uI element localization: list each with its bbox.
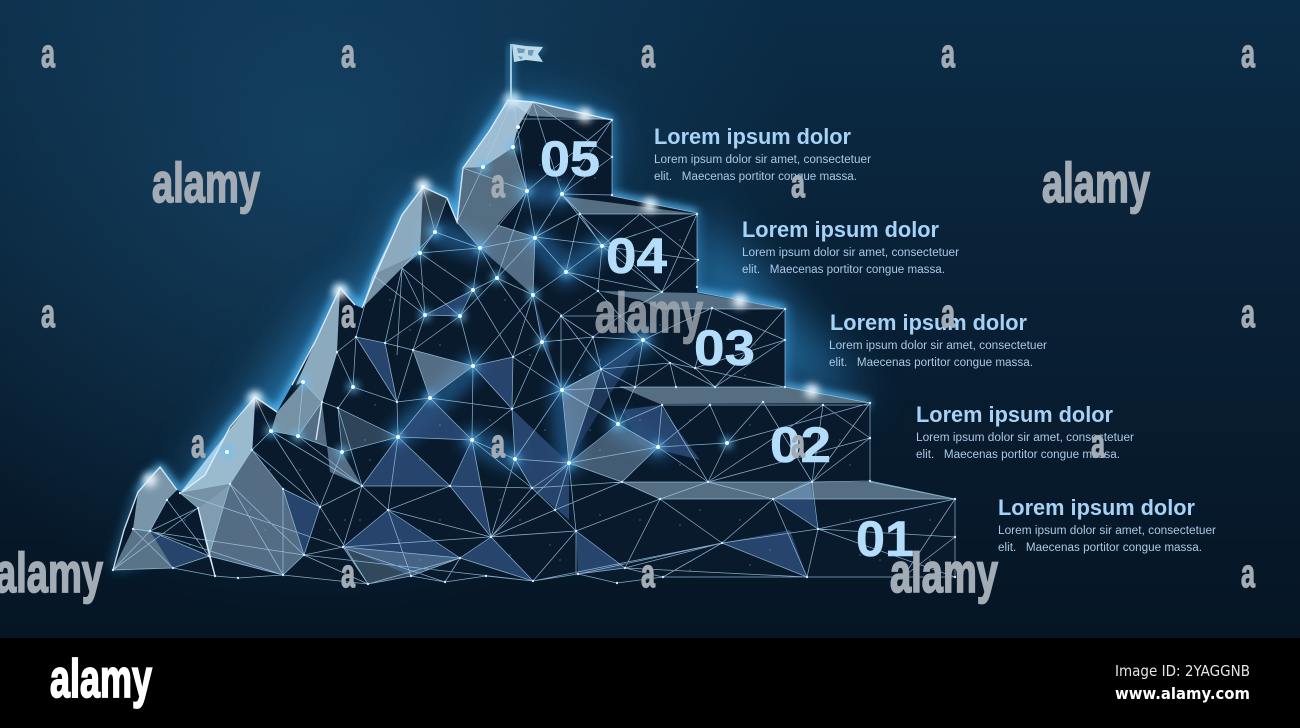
watermarks: a <box>491 422 505 466</box>
watermarks: a <box>1241 552 1255 596</box>
watermarks: a <box>941 292 955 336</box>
text block 02 <box>916 402 1134 461</box>
number 05: 05 <box>540 131 600 187</box>
mesh specks <box>185 150 930 570</box>
text block 04 <box>742 217 959 276</box>
watermarks <box>0 32 1255 604</box>
text block 05: elit. Maecenas portitor congue massa. <box>654 171 857 183</box>
text block 03 <box>829 310 1047 369</box>
mesh lines <box>113 100 955 584</box>
peak glows <box>150 99 812 480</box>
lit ridge facets <box>113 100 955 576</box>
blue facets <box>150 290 818 581</box>
watermarks: alamy <box>890 541 998 604</box>
stair top faces <box>561 196 697 214</box>
text block 03: Lorem ipsum dolor <box>830 310 1027 335</box>
text block 05: Lorem ipsum dolor <box>654 124 851 149</box>
text block 02: elit. Maecenas portitor congue massa. <box>916 449 1120 461</box>
watermarks: a <box>341 552 355 596</box>
text block 05: Lorem ipsum dolor sir amet, consectetuer <box>654 154 871 166</box>
mountain with stepped right side <box>113 44 955 584</box>
grey-blue facets <box>209 225 658 584</box>
text block 02: Lorem ipsum dolor <box>916 402 1113 427</box>
footer bar <box>0 638 1300 728</box>
text block 04: elit. Maecenas portitor congue massa. <box>742 264 945 276</box>
mesh nodes <box>227 127 727 463</box>
watermarks: a <box>791 162 805 206</box>
text block 04: Lorem ipsum dolor <box>742 217 939 242</box>
watermarks: a <box>1241 32 1255 76</box>
watermarks: a <box>341 32 355 76</box>
text block 01: Lorem ipsum dolor <box>998 495 1195 520</box>
watermarks: alamy <box>1042 151 1150 214</box>
text block 02: Lorem ipsum dolor sir amet, consectetuer <box>916 432 1134 444</box>
number 01: 01 <box>856 511 914 567</box>
watermarks: a <box>941 32 955 76</box>
watermarks: a <box>641 552 655 596</box>
watermarks: a <box>41 32 55 76</box>
inner blue glow <box>398 191 658 463</box>
watermarks: a <box>41 292 55 336</box>
watermarks: a <box>1091 422 1105 466</box>
watermarks: a <box>491 162 505 206</box>
number 02: 02 <box>770 417 831 473</box>
text block 01: elit. Maecenas portitor congue massa. <box>998 542 1202 554</box>
website: www.alamy.com <box>1115 684 1250 703</box>
watermarks: a <box>641 32 655 76</box>
watermarks: a <box>791 422 805 466</box>
text block 03: Lorem ipsum dolor sir amet, consectetuer <box>829 340 1047 352</box>
text block 01 <box>998 495 1216 554</box>
watermarks: a <box>191 422 205 466</box>
number 03: 03 <box>694 320 755 376</box>
outer glow <box>113 100 870 570</box>
watermarks: alamy <box>595 281 703 344</box>
node glow <box>227 147 727 463</box>
watermarks: a <box>341 292 355 336</box>
watermarks: alamy <box>152 151 260 214</box>
text block 01: Lorem ipsum dolor sir amet, consectetuer <box>998 525 1216 537</box>
text block 04: Lorem ipsum dolor sir amet, consectetuer <box>742 247 959 259</box>
ridge outline <box>113 100 612 576</box>
number 04: 04 <box>606 228 667 284</box>
footer logo: alamy <box>50 649 152 709</box>
text block 05 <box>654 124 871 183</box>
mountain body <box>113 100 955 584</box>
watermarks: a <box>1241 292 1255 336</box>
flag on summit <box>511 44 543 100</box>
text block 03: elit. Maecenas portitor congue massa. <box>829 357 1033 369</box>
image id: Image ID: 2YAGGNB <box>1115 662 1250 680</box>
